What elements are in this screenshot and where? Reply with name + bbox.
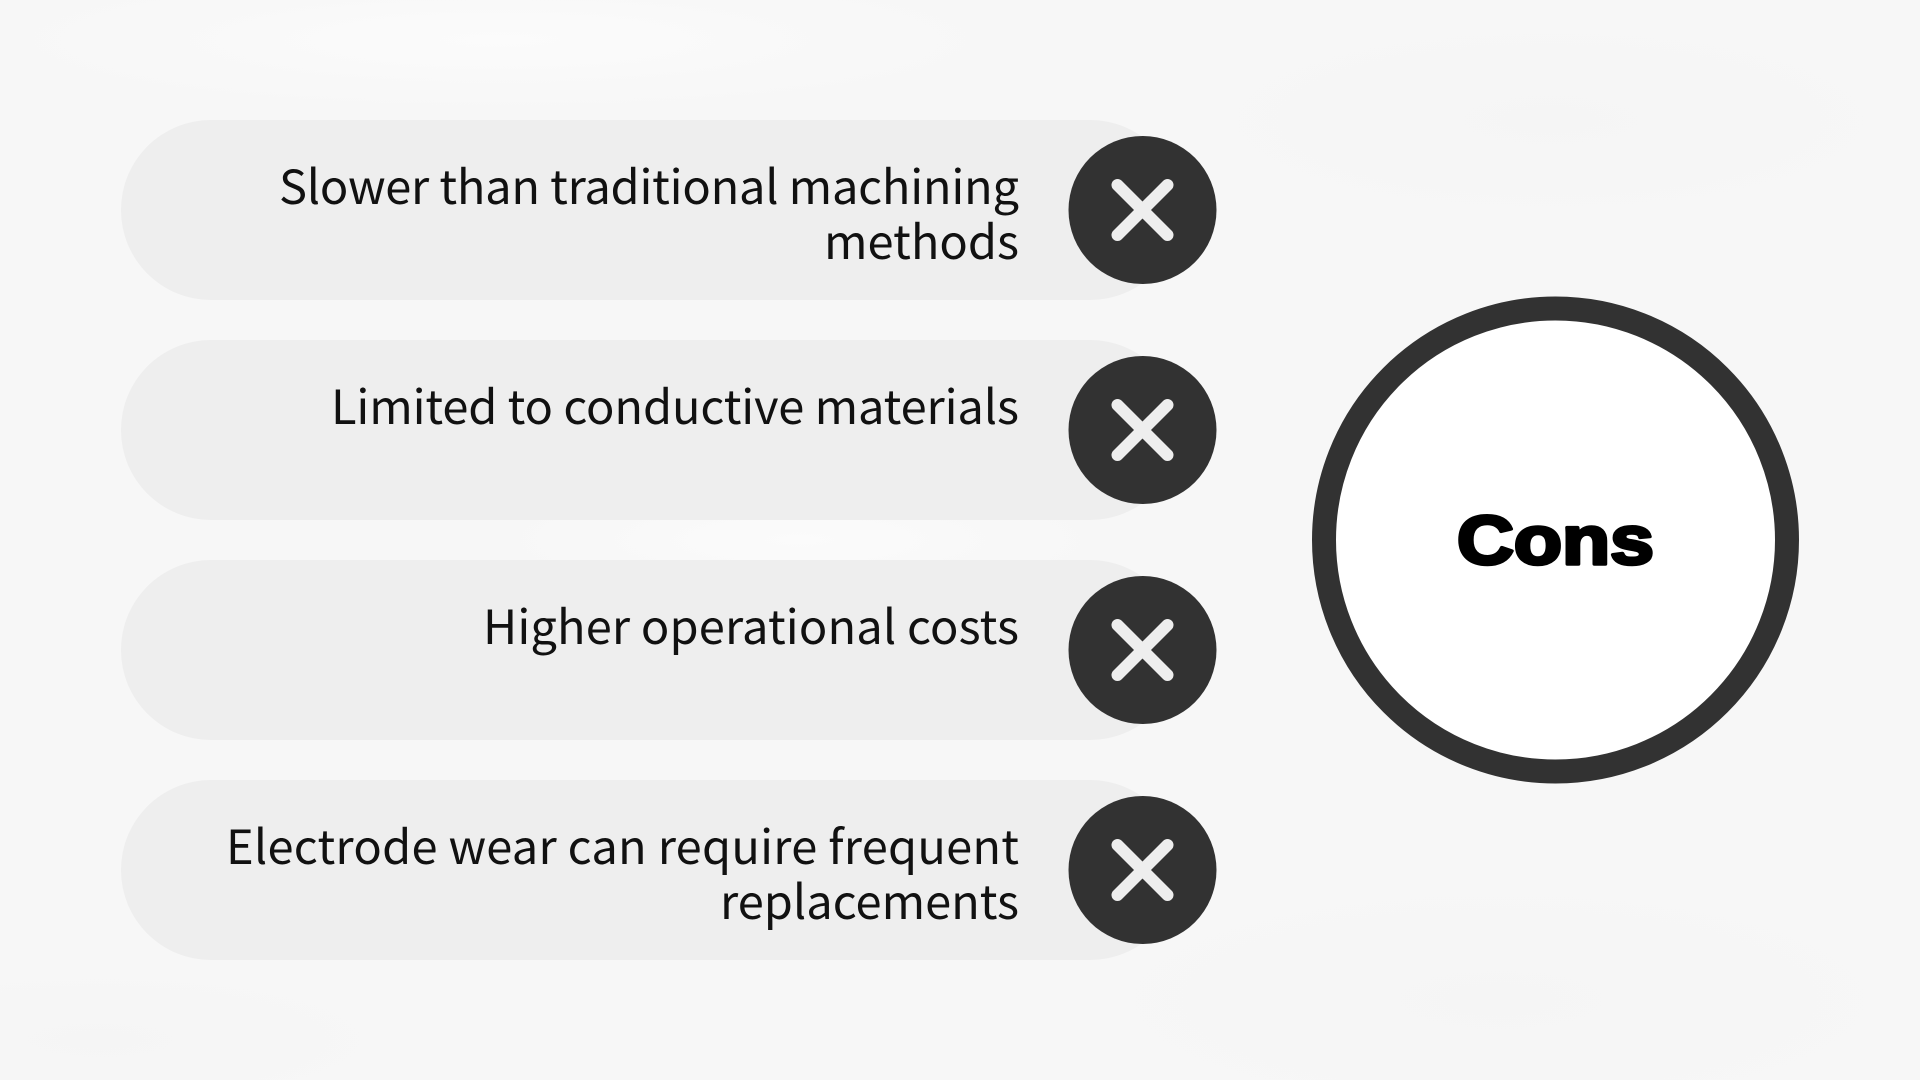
row 4 pill: [121, 780, 1180, 960]
row 4 text: Electrode wear can require frequent: [226, 809, 1019, 878]
row 2: limited to conductive materials: [121, 340, 1216, 520]
row 4 text: replacements: [720, 864, 1019, 933]
row 4 icon: x mark: [1068, 796, 1216, 944]
row 1: slower than traditional machining methods: [121, 120, 1216, 300]
row 3 icon: x mark: [1068, 576, 1216, 724]
cons badge: [1324, 308, 1787, 772]
row 3: higher operational costs: [121, 560, 1216, 740]
row 1 pill: [121, 120, 1180, 300]
badge heading: Cons: [1457, 502, 1654, 579]
row 1 text: methods: [824, 204, 1019, 273]
row 3 text: Higher operational costs: [483, 589, 1019, 658]
badge ring: [1324, 308, 1787, 772]
row 1 icon: x mark: [1068, 136, 1216, 284]
row 2 text: Limited to conductive materials: [331, 369, 1019, 438]
row 1 text: Slower than traditional machining: [279, 149, 1019, 218]
row 2 pill: [121, 340, 1180, 520]
row 1 text: [279, 149, 1019, 273]
row 4 text: [226, 809, 1019, 933]
row 2 icon: x mark: [1068, 356, 1216, 504]
row 3 pill: [121, 560, 1180, 740]
row 4: electrode wear can require frequent replacements: [121, 780, 1216, 960]
